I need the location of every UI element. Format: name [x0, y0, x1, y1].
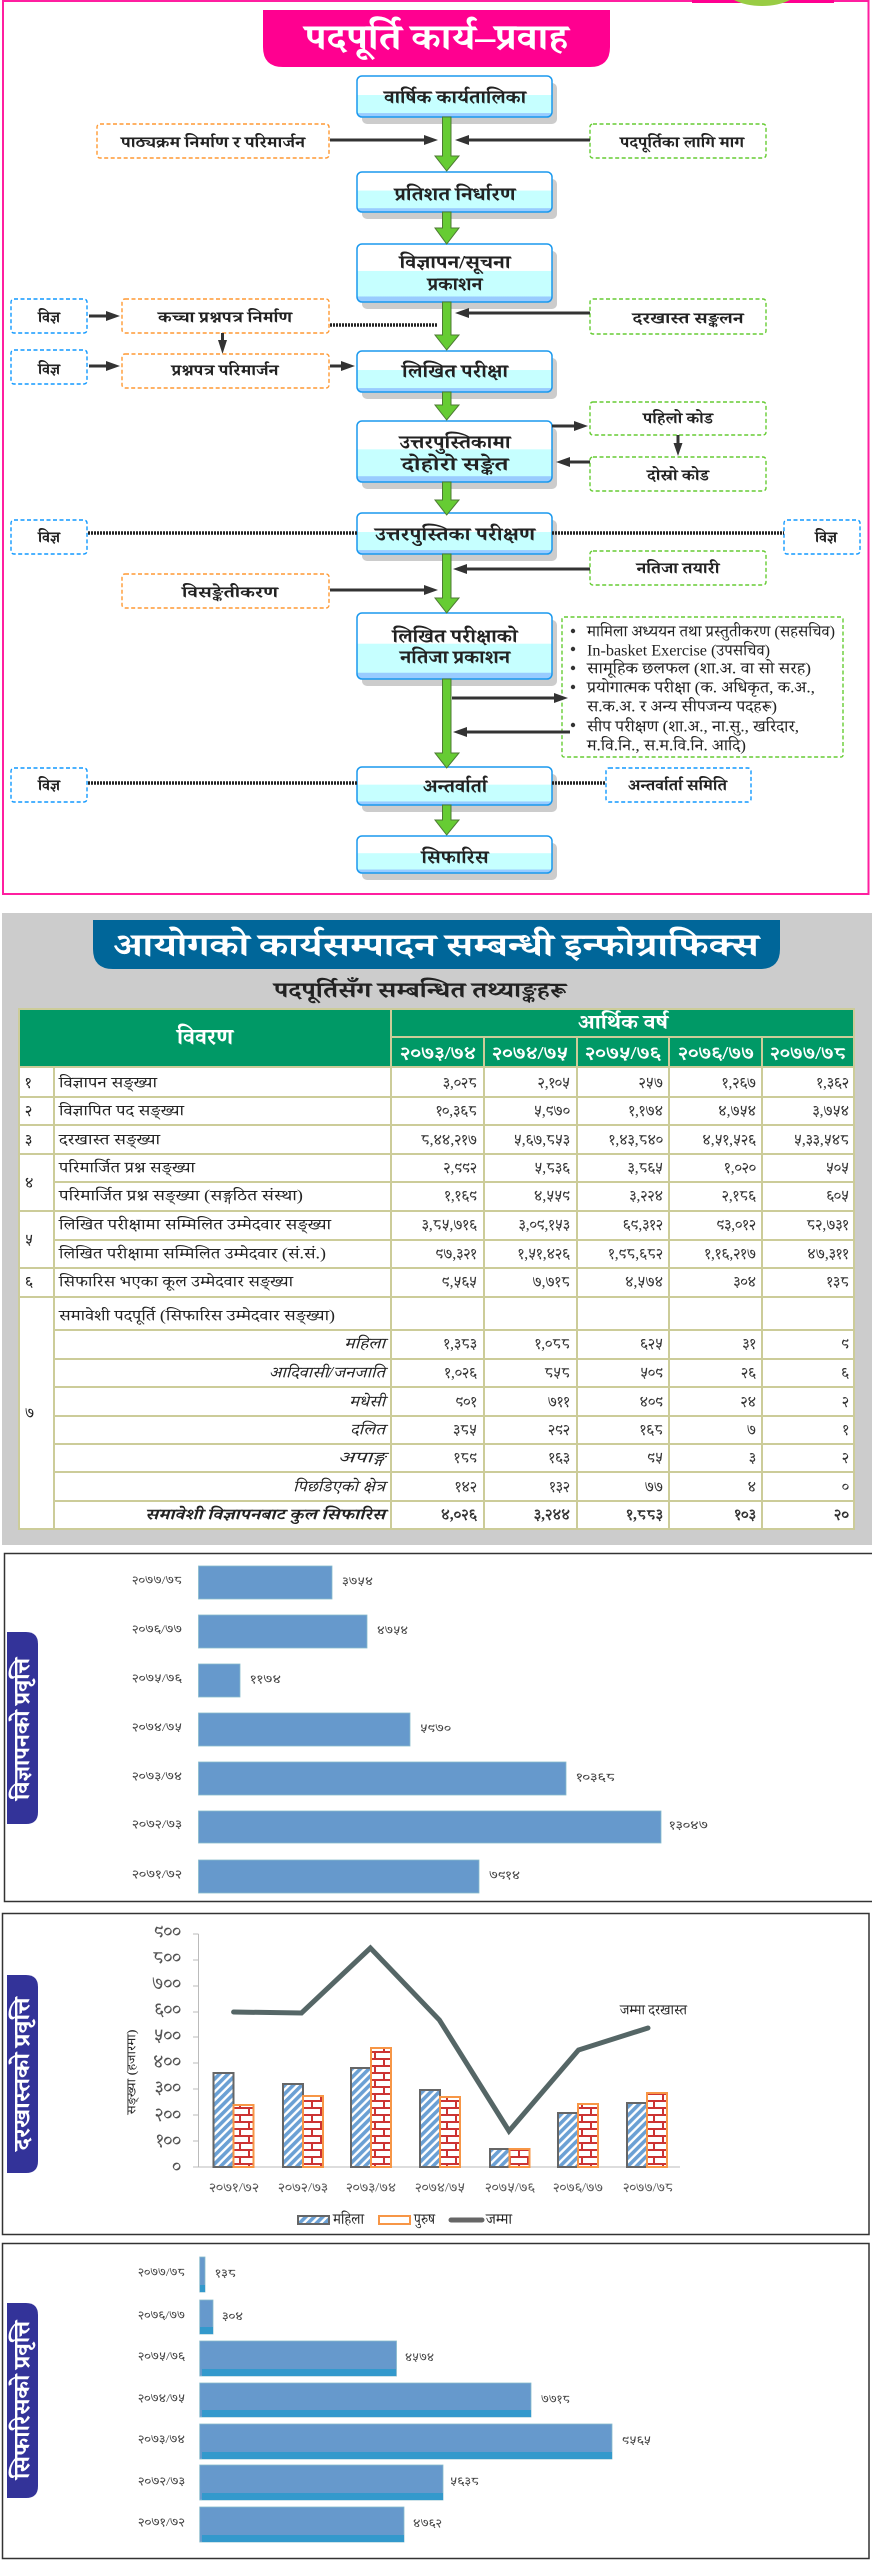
box: answer sheet evaluation: [357, 513, 557, 561]
row 7: ५०९: [640, 1364, 663, 1382]
row 7: ८५८: [544, 1364, 570, 1382]
row 6: ४,५७४: [625, 1274, 663, 1290]
note: result preparation: [590, 551, 766, 585]
x labels: २०७७/७८: [623, 2180, 673, 2194]
note: expert 1: [11, 299, 87, 333]
row 2: २: [25, 1102, 32, 1120]
box: percentage determination: [357, 172, 557, 219]
panel: applications trend chart: [2, 1914, 869, 2234]
arrow: result prep to flow: [453, 564, 590, 574]
legend: पुरुष: [413, 2212, 436, 2228]
legend: महिला: [332, 2211, 365, 2228]
panel: performance infographics: [2, 913, 872, 1545]
line: total applications: [234, 1948, 688, 2131]
box: recommendation: [357, 836, 557, 880]
note: paper moderation: [122, 354, 329, 388]
row 4: ४,५५९: [534, 1188, 570, 1204]
panel: skill test list: प्रयोगात्मक परीक्षा (क. अधिकृत, क.अ.,: [586, 678, 815, 696]
row 7: [25, 1306, 849, 1524]
box: answer sheet evaluation: उत्तरपुस्तिका परीक्षण: [373, 522, 537, 546]
bar: 2076/77: २०७६/७७: [132, 1622, 182, 1636]
title: flowchart heading: [263, 10, 610, 67]
side tab: application trend: दरखास्तको प्रवृत्ति: [8, 1996, 36, 2153]
row 7: १,०८८: [535, 1336, 570, 1352]
row 3: ५,६७,८५३: [514, 1132, 570, 1148]
note: expert 2: विज्ञ: [37, 360, 61, 378]
panel: skill test list: मामिला अध्ययन तथा प्रस्तुतीकरण (सहसचिव): [586, 622, 835, 640]
bar: 2076/77: [132, 1615, 408, 1648]
arrow: flow to skill test: [452, 693, 568, 703]
row 7: ६: [841, 1364, 849, 1382]
note: expert right: विज्ञ: [814, 528, 838, 546]
row 7: समावेशी पदपूर्ति (सिफारिस उम्मेदवार सङ्ख्या): [58, 1306, 335, 1326]
box: written exam result: [357, 613, 557, 686]
x labels: २०७५/७६: [485, 2180, 535, 2194]
x labels: २०७३/७४: [346, 2180, 396, 2194]
axis: y: ७००: [152, 1974, 181, 1994]
row 3: [25, 1132, 849, 1150]
axis: y: [152, 1922, 680, 2178]
axis: y: ३००: [155, 2078, 181, 2098]
row 4: ५०५: [826, 1160, 849, 1176]
bar: 2074/75: [138, 2383, 570, 2417]
row 7: १६८: [640, 1422, 663, 1438]
bar: 2071/72: ७९१४: [489, 1868, 520, 1882]
table header cells: २०७६/७७: [678, 1043, 754, 1063]
row 2: [25, 1102, 849, 1121]
row 6: [25, 1272, 849, 1292]
axis: y: ९००: [154, 1922, 181, 1942]
row 4: २,१८६: [722, 1188, 756, 1204]
row 4: [25, 1158, 849, 1206]
bar: 2076/77: [138, 2300, 243, 2334]
box: annual calendar: [357, 76, 557, 124]
connector: expert right dotted: [552, 531, 784, 535]
row 5: ९३,०१२: [716, 1216, 756, 1234]
row 2: विज्ञापित पद सङ्ख्या: [58, 1102, 185, 1121]
row 4: ४: [25, 1174, 33, 1192]
row 3: ८,४४,२१७: [421, 1132, 477, 1148]
bar: 2073/74: [132, 1762, 615, 1795]
arrow: green flow 1: [435, 117, 459, 171]
icon: green emblem at top edge: [734, 0, 790, 6]
box: advertisement publication: [357, 244, 557, 309]
bar: 2074/75: २०७४/७५: [138, 2391, 185, 2405]
box: written exam result: लिखित परीक्षाको: [390, 624, 520, 648]
bar: 2075/76: [132, 1664, 281, 1697]
row 2: ३,७५४: [813, 1102, 849, 1120]
box: interview: [357, 767, 557, 812]
arrow: green flow 3: [435, 302, 459, 350]
panel: skill test list: म.वि.नि., स.म.वि.नि. आदि): [586, 736, 746, 754]
bar: 2075/76: ११७४: [250, 1672, 281, 1686]
axis: y: ६००: [154, 2000, 181, 2020]
legend: [298, 2211, 513, 2228]
side tab: application trend: [7, 1975, 38, 2173]
arrow: box to first code: [552, 421, 588, 431]
row 5: १,१६,२१७: [704, 1246, 756, 1262]
row 7: २६: [741, 1364, 756, 1382]
arrow: green flow 2: [435, 212, 459, 244]
bar: 2077/78: १३८: [215, 2266, 236, 2280]
axis: y: २००: [155, 2104, 181, 2126]
row 7: मधेसी: [349, 1392, 389, 1410]
bar: 2074/75: ५९७०: [420, 1721, 452, 1735]
line: total applications: जम्मा दरखास्त: [619, 2004, 688, 2018]
bar: 2074/75: ७७१८: [541, 2392, 570, 2406]
row 7: ७७: [645, 1478, 663, 1496]
axis: y: ८००: [153, 1948, 181, 1968]
box: advertisement publication: विज्ञापन/सूचना: [397, 252, 513, 274]
heading: infographics banner: [93, 920, 780, 969]
row 2: १०,३६८: [436, 1102, 477, 1120]
panel: recruitment flowchart: [3, 0, 868, 894]
row 3: ५,३३,५४८: [794, 1132, 849, 1148]
panel: advertisement trend chart: [4, 1554, 872, 1902]
note: application collection: दरखास्त सङ्कलन: [631, 310, 745, 328]
bar: 2072/73: १३०४७: [669, 1818, 708, 1832]
row 6: ७,७१८: [532, 1274, 570, 1290]
row 4: परिमार्जित प्रश्न सङ्ख्या (सङ्गठित संस्था): [58, 1186, 303, 1206]
box: written exam result: नतिजा प्रकाशन: [398, 646, 512, 668]
row 7: आदिवासी/जनजाति: [269, 1364, 389, 1382]
row 7: ३,२४४: [534, 1506, 570, 1524]
row 6: ६: [25, 1274, 33, 1290]
row 1: २५७: [639, 1074, 663, 1092]
row 1: १,२६७: [722, 1074, 756, 1092]
note: second code: [590, 457, 766, 491]
panel: skill test list: [562, 617, 843, 757]
bar: 2075/76: २०७५/७६: [138, 2349, 185, 2363]
bar: 2073/74: [138, 2424, 651, 2459]
bar: 2077/78: २०७७/७८: [138, 2265, 185, 2279]
arrow: draft to moderation: [218, 333, 227, 354]
arrow: second code to box: [556, 457, 590, 467]
row 6: ३०४: [733, 1274, 756, 1290]
bar: 2077/78: ३७५४: [342, 1574, 373, 1588]
note: decoding: विसङ्केतीकरण: [181, 583, 279, 602]
bar: 2072/73: ५६३८: [450, 2474, 479, 2488]
note: expert right: [784, 520, 860, 554]
table header cells: २०७४/७५: [492, 1043, 568, 1063]
box: answer sheet double coding: उत्तरपुस्तिकामा: [397, 432, 513, 454]
side tab: recommendation trend: सिफारिसको प्रवृत्ति: [8, 2319, 36, 2481]
box: percentage determination: प्रतिशत निर्धारण: [392, 183, 518, 206]
panel: skill test list: स.क.अ. र अन्य सीपजन्य पदहरू): [586, 698, 777, 716]
bar: 2075/76: २०७५/७६: [132, 1671, 182, 1685]
panel: skill test list: In-basket Exercise (उपसचिव): [587, 642, 770, 660]
row 7: ३८५: [453, 1422, 477, 1438]
bar: 2075/76: ४५७४: [405, 2350, 434, 2364]
row 7: ०: [842, 1478, 849, 1496]
arrow: applications to flow: [455, 308, 590, 318]
row 5: ४७,३११: [807, 1246, 849, 1262]
note: syllabus: पाठ्यक्रम निर्माण र परिमार्जन: [120, 132, 306, 152]
row 7: २४: [740, 1394, 756, 1410]
row 2: १,१७४: [628, 1102, 663, 1120]
table: recruitment data: [18, 1008, 855, 1530]
row 7: १४२: [455, 1478, 477, 1496]
row 7: दलित: [350, 1420, 389, 1438]
row 1: विज्ञापन सङ्ख्या: [58, 1074, 158, 1093]
note: second code: दोस्रो कोड: [646, 466, 711, 484]
bar: 2072/73: २०७२/७३: [132, 1817, 182, 1831]
row 7: २०: [834, 1506, 849, 1524]
connector: draft paper dotted: [330, 323, 438, 327]
note: expert interview: [11, 768, 87, 802]
row 5: ६९,३१२: [623, 1216, 663, 1234]
bar: 2074/75: २०७४/७५: [132, 1720, 182, 1734]
row 7: १: [842, 1422, 849, 1438]
bar: 2074/75: [132, 1713, 452, 1746]
row 7: १३२: [549, 1478, 570, 1496]
panel: skill test list: सामूहिक छलफल (शा.अ. वा सो सरह): [586, 660, 811, 678]
bar: 2073/74: २०७३/७४: [132, 1769, 182, 1783]
note: first code: [590, 402, 766, 435]
arrow: green flow 6: [435, 554, 459, 613]
row 7: २: [842, 1394, 849, 1410]
table header cells: [175, 1010, 846, 1063]
note: interview committee: [606, 768, 751, 802]
row 7: ४: [748, 1478, 756, 1496]
row 5: ३,८५,७१६: [422, 1216, 477, 1234]
row 3: १,४३,८४०: [609, 1132, 663, 1148]
row 6: ९,५६५: [442, 1274, 477, 1290]
row 4: ३,२२४: [629, 1188, 663, 1204]
note: result preparation: नतिजा तयारी: [635, 558, 721, 578]
row 5: ३,०९,१५३: [519, 1216, 570, 1234]
box: recommendation: सिफारिस: [419, 846, 490, 868]
row 7: ९: [841, 1336, 849, 1352]
note: draft question paper: [122, 299, 329, 333]
bar: 2072/73: [132, 1811, 708, 1843]
row 1: २,१०५: [538, 1074, 570, 1092]
bar: 2077/78: २०७७/७८: [132, 1573, 182, 1587]
bar: 2071/72: ४७६२: [413, 2516, 442, 2530]
panel: recommendation trend chart: [2, 2244, 869, 2558]
box: answer sheet double coding: दोहोरो सङ्केत: [399, 454, 510, 476]
bar: 2071/72: [138, 2507, 442, 2542]
row 5: लिखित परीक्षामा सम्मिलित उम्मेदवार (सं.सं.): [58, 1244, 326, 1262]
note: application collection: [590, 299, 766, 334]
x labels: २०७४/७५: [415, 2180, 465, 2194]
bar: 2071/72: २०७१/७२: [132, 1867, 182, 1881]
row 2: ४,७५४: [718, 1102, 756, 1120]
row 5: १,५१,४२६: [518, 1246, 570, 1262]
table header cells: २०७५/७६: [585, 1043, 661, 1063]
row 3: ३: [25, 1132, 32, 1148]
row 1: ३,०२८: [443, 1074, 477, 1092]
row 6: १३८: [826, 1274, 849, 1290]
note: expert 1: विज्ञ: [37, 308, 61, 326]
note: first code: पहिलो कोड: [642, 410, 715, 428]
row 3: ४,५१,५२६: [702, 1132, 756, 1148]
bar: 2077/78: [132, 1566, 373, 1599]
arrow: decoding to flow: [330, 585, 438, 595]
note: interview committee: अन्तर्वार्ता समिति: [628, 775, 729, 794]
row 7: ३१: [742, 1336, 756, 1352]
bars: women and men: [214, 2048, 667, 2167]
row 7: २: [842, 1450, 849, 1466]
arrow: demand to flow: [455, 135, 590, 145]
row 5: ९७,३२१: [435, 1246, 477, 1262]
arrow: green flow 4: [435, 392, 459, 420]
row 4: १,१६९: [444, 1188, 477, 1204]
x labels: २०७२/७३: [278, 2180, 328, 2194]
table header cells: विवरण: [175, 1022, 235, 1050]
row 7: अपाङ्ग: [338, 1450, 390, 1466]
row 5: ८२,७३१: [806, 1216, 849, 1234]
row 7: २९२: [548, 1422, 570, 1438]
row 7: महिला: [344, 1334, 389, 1352]
box: annual calendar: वार्षिक कार्यतालिका: [382, 86, 528, 108]
note: paper moderation: प्रश्नपत्र परिमार्जन: [170, 360, 280, 380]
row 7: ७: [747, 1422, 756, 1438]
row 7: ९५: [647, 1450, 663, 1466]
arrow: green flow 5: [435, 482, 459, 515]
note: expert 2: [11, 350, 87, 384]
bar: 2073/74: १०३६८: [576, 1770, 615, 1784]
note: syllabus: [97, 124, 329, 158]
row 7: ४०९: [640, 1394, 663, 1410]
arrow: green flow 8: [435, 805, 459, 835]
row 7: १,०२६: [444, 1364, 477, 1382]
x labels: [209, 2180, 673, 2194]
axis: y: १००: [156, 2130, 181, 2152]
row 1: [25, 1074, 849, 1093]
row 5: १,९८,६८२: [608, 1246, 663, 1262]
note: expert left: विज्ञ: [37, 528, 61, 546]
side tab: recommendation trend: [7, 2303, 38, 2498]
panel: skill test list: सीप परीक्षण (शा.अ., ना.सु., खरिदार,: [586, 716, 799, 736]
row 7: ७: [25, 1404, 34, 1422]
table header cells: २०७३/७४: [400, 1043, 476, 1063]
row 7: समावेशी विज्ञापनबाट कुल सिफारिस: [145, 1506, 389, 1524]
row 7: १,८८३: [626, 1506, 663, 1524]
row 7: १०३: [734, 1506, 756, 1524]
note: demand: [590, 124, 766, 158]
row 1: १,३६२: [816, 1074, 849, 1092]
row 7: ९०१: [456, 1394, 477, 1410]
box: answer sheet double coding: [357, 421, 557, 489]
side tab: advertisement trend: विज्ञापनको प्रवृत्ति: [8, 1656, 36, 1802]
row 7: १,३८३: [444, 1336, 477, 1352]
note: expert interview: विज्ञ: [37, 776, 61, 794]
x labels: २०७६/७७: [553, 2180, 603, 2194]
box: interview: अन्तर्वार्ता: [423, 775, 489, 798]
arrow: expert 1: [89, 311, 120, 321]
connector: expert left dotted: [88, 531, 357, 535]
row 5: ५: [25, 1232, 33, 1248]
connector: interview committee dotted: [552, 781, 606, 785]
table header cells: २०७७/७८: [770, 1043, 846, 1063]
bar: 2073/74: ९५६५: [622, 2433, 651, 2447]
bar: 2073/74: २०७३/७४: [138, 2432, 185, 2446]
bar: 2071/72: [132, 1860, 520, 1893]
row 4: ३,८६५: [628, 1160, 663, 1176]
arrow: syllabus to flow: [330, 135, 438, 145]
bar: 2071/72: २०७१/७२: [138, 2515, 185, 2529]
row 4: १,०२०: [724, 1160, 756, 1176]
row 5: लिखित परीक्षामा सम्मिलित उम्मेदवार सङ्ख्या: [58, 1214, 332, 1235]
row 7: ४,०२६: [441, 1506, 478, 1524]
bar: 2077/78: [138, 2257, 236, 2292]
table header cells: आर्थिक वर्ष: [578, 1010, 670, 1034]
row 2: ५,९७०: [534, 1102, 570, 1120]
row 7: पिछडिएको क्षेत्र: [293, 1478, 389, 1496]
bar: 2072/73: २०७२/७३: [138, 2474, 185, 2488]
row 5: [25, 1214, 849, 1262]
arrow: green flow 7: [435, 679, 459, 768]
bar: 2076/77: २०७६/७७: [138, 2308, 185, 2322]
box: written exam: [357, 351, 557, 399]
box: written exam: लिखित परीक्षा: [400, 360, 510, 382]
row 4: २,९९२: [443, 1160, 477, 1176]
bar: 2076/77: ४७५४: [377, 1623, 408, 1637]
bar: 2075/76: [138, 2341, 434, 2376]
box: advertisement publication: प्रकाशन: [425, 274, 484, 296]
legend: जम्मा: [485, 2212, 513, 2228]
note: decoding: [122, 574, 329, 608]
row 7: ३: [749, 1450, 756, 1466]
axis: y: ४००: [153, 2052, 181, 2072]
row 4: परिमार्जित प्रश्न सङ्ख्या: [58, 1158, 196, 1178]
bar: 2076/77: ३०४: [222, 2309, 243, 2323]
row 6: सिफारिस भएका कूल उम्मेदवार सङ्ख्या: [58, 1272, 294, 1292]
axis: y: ०: [172, 2156, 181, 2178]
heading: infographics banner: आयोगको कार्यसम्पादन सम्बन्धी इन्फोग्राफिक्स: [114, 926, 761, 964]
axis title: सङ्ख्या (हजारमा): [124, 2030, 140, 2116]
row 7: १८९: [454, 1450, 477, 1466]
note: draft question paper: कच्चा प्रश्नपत्र निर्माण: [157, 307, 293, 326]
side tab: advertisement trend: [7, 1632, 38, 1824]
note: expert left: [11, 520, 87, 554]
row 4: ६०५: [826, 1188, 849, 1204]
row 7: १६३: [548, 1450, 570, 1466]
row 1: १: [25, 1074, 32, 1092]
row 7: ६२५: [640, 1336, 663, 1352]
arrow: moderation to exam: [330, 361, 355, 371]
x labels: २०७१/७२: [209, 2180, 259, 2194]
heading: table subtitle: पदपूर्तिसँग सम्बन्धित तथ्याङ्कहरू: [272, 976, 568, 1004]
row 7: ७११: [548, 1394, 570, 1410]
bar: 2072/73: [138, 2465, 479, 2500]
title: flowchart heading: पदपूर्ति कार्य–प्रवाह: [302, 16, 571, 61]
arrow: expert 2: [89, 361, 120, 371]
axis: y: ५००: [154, 2026, 181, 2046]
arrow: first to second code: [674, 435, 682, 456]
row 3: दरखास्त सङ्ख्या: [58, 1132, 161, 1150]
row 4: ५,८३६: [534, 1160, 570, 1176]
note: demand: पदपूर्तिका लागि माग: [619, 132, 745, 152]
connector: expert interview dotted: [88, 781, 357, 785]
arrow: skill test to flow: [453, 727, 570, 737]
